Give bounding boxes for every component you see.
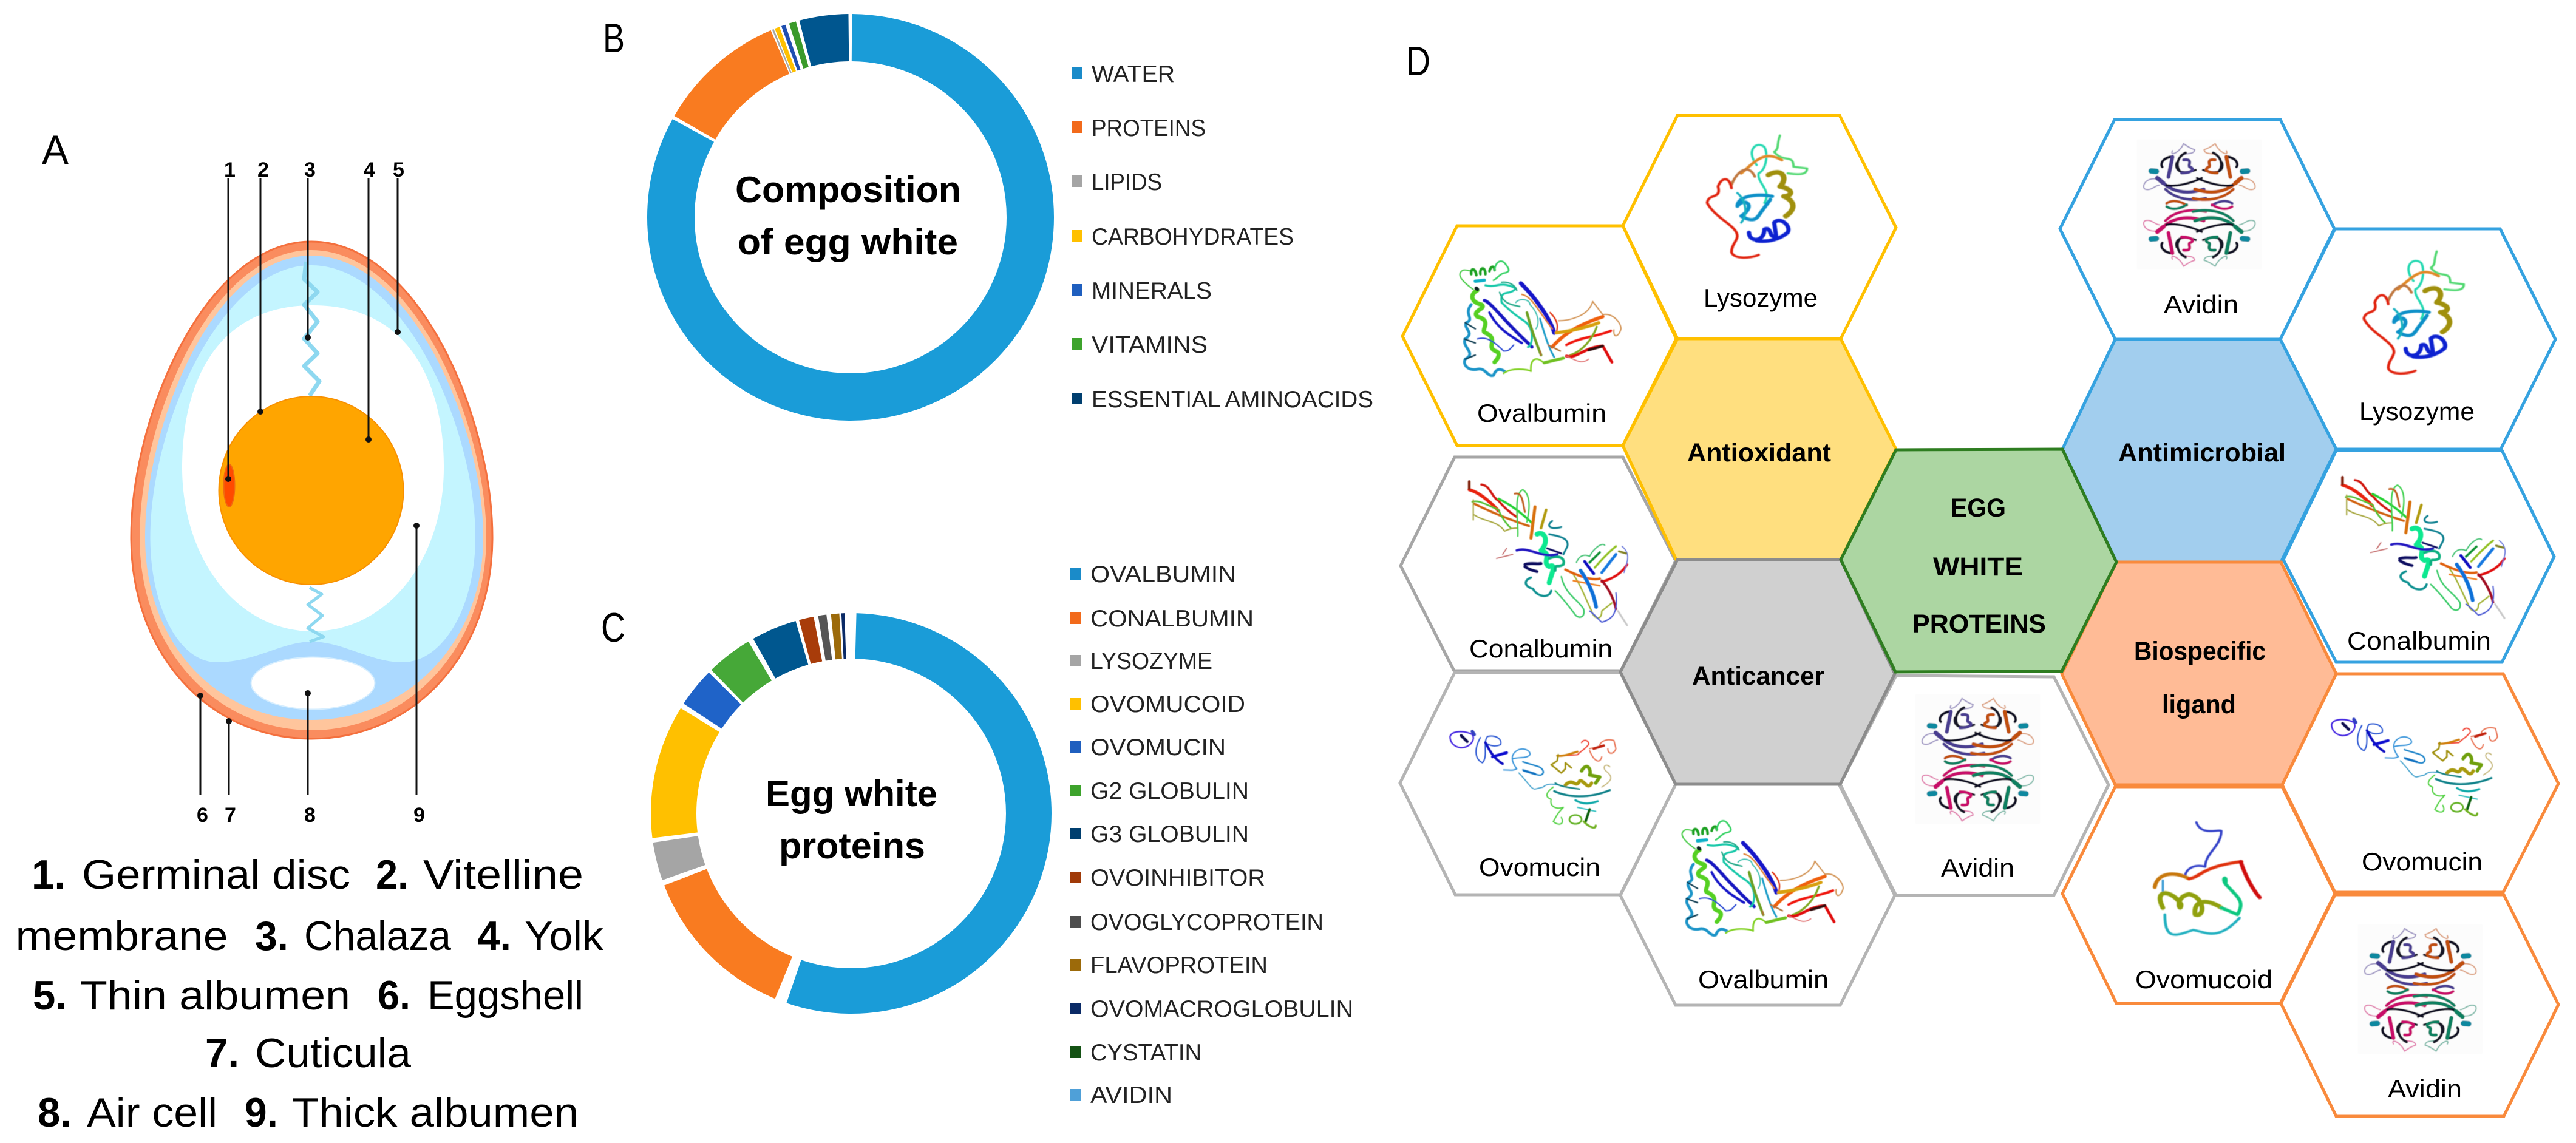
legend: composition: VITAMINS — [1092, 332, 1208, 358]
callout numbers: 9 — [413, 804, 425, 827]
egg parts key text: Chalaza — [304, 913, 451, 959]
egg parts key text: 5. — [33, 972, 67, 1019]
callout numbers: 2 — [257, 158, 269, 181]
yolk — [219, 396, 403, 585]
panel: C egg white proteins — [601, 561, 1353, 1108]
legend: proteins: OVOMUCIN — [1090, 734, 1226, 761]
egg parts key text: membrane — [16, 913, 228, 959]
legend: proteins: AVIDIN — [1090, 1082, 1172, 1108]
hexagon: Biospecific ligand category — [2062, 562, 2336, 785]
egg parts key text: 1. — [32, 852, 66, 898]
hexagon: EGG WHITE PROTEINS centre: PROTEINS — [1912, 609, 2046, 639]
egg parts key text: Eggshell — [427, 972, 583, 1019]
lower chalaza — [308, 588, 324, 642]
thin albumen — [151, 265, 475, 662]
egg cross-section illustration — [131, 242, 492, 739]
hexagon: Avidin (anticancer): Avidin — [1941, 853, 2014, 882]
panel letter D: D — [1406, 38, 1430, 84]
donut centre title: proteins — [779, 826, 925, 866]
donut centre title — [766, 773, 937, 866]
egg parts key text: Germinal disc — [82, 852, 350, 898]
air cell — [251, 657, 375, 709]
hexagon: Biospecific ligand category: ligand — [2162, 690, 2236, 719]
callout numbers — [197, 158, 425, 827]
eggshell and cuticula — [131, 242, 492, 739]
hexagon: Ovomucoid (biospecific ligand): Ovomucoid — [2135, 965, 2272, 994]
callout numbers: 3 — [304, 158, 316, 181]
hexagon: Ovomucin (biospecific ligand) — [2282, 674, 2558, 892]
panel: D egg white protein hexagon map — [1400, 38, 2558, 1116]
callout numbers: 4 — [364, 158, 375, 181]
callout numbers: 1 — [224, 158, 236, 181]
hexagon: Ovalbumin (antioxidant) — [1402, 226, 1676, 446]
hexagon: EGG WHITE PROTEINS centre: WHITE — [1933, 552, 2023, 582]
egg parts key text: Thin albumen — [80, 972, 350, 1019]
donut centre title: of egg white — [738, 222, 958, 262]
legend: proteins: OVOMACROGLOBULIN — [1090, 996, 1353, 1022]
egg parts key text: 8. — [38, 1090, 72, 1136]
egg parts key text: 9. — [245, 1090, 278, 1136]
hexagon: Ovalbumin (antioxidant): Ovalbumin — [1477, 399, 1606, 427]
legend: composition: ESSENTIAL AMINOACIDS — [1092, 387, 1373, 413]
legend: proteins: CYSTATIN — [1090, 1040, 1201, 1066]
hexagon: Anticancer category — [1620, 560, 1895, 784]
egg parts key text: 6. — [378, 972, 410, 1019]
callout numbers: 7 — [225, 804, 236, 827]
hexagon: Lysozyme (antimicrobial) — [2280, 229, 2555, 449]
legend: composition: PROTEINS — [1092, 115, 1206, 141]
hexagon: Avidin (antimicrobial) — [2060, 120, 2334, 339]
legend: composition: WATER — [1092, 61, 1175, 87]
hexagon: Antioxidant category — [1623, 339, 1896, 560]
hexagon: Lysozyme (antimicrobial): Lysozyme — [2359, 397, 2475, 426]
hexagon: Conalbumin (antimicrobial): Conalbumin — [2347, 626, 2491, 655]
shell membrane — [140, 250, 486, 730]
outer blue membrane — [145, 256, 483, 720]
callout numbers: 5 — [393, 158, 404, 181]
egg parts key text: Air cell — [87, 1090, 217, 1136]
legend: proteins — [1070, 561, 1353, 1108]
legend: proteins: OVOINHIBITOR — [1090, 865, 1265, 891]
legend: composition — [1072, 61, 1373, 413]
legend: proteins: OVOMUCOID — [1090, 691, 1245, 717]
panel letter C: C — [601, 605, 625, 651]
legend: proteins: G3 GLOBULIN — [1090, 821, 1249, 847]
panel letter A: A — [42, 127, 69, 173]
hexagon: Conalbumin (anticancer): Conalbumin — [1469, 634, 1613, 663]
callout lines and dots — [197, 178, 420, 795]
callout numbers: 8 — [304, 804, 316, 827]
donut centre title — [735, 169, 961, 262]
legend: proteins: OVOGLYCOPROTEIN — [1090, 909, 1324, 935]
hexagon: EGG WHITE PROTEINS centre — [1841, 449, 2116, 672]
legend: proteins: G2 GLOBULIN — [1090, 778, 1249, 804]
germinal disc — [223, 464, 234, 507]
legend: composition: LIPIDS — [1092, 169, 1162, 195]
hexagon: Conalbumin (anticancer) — [1401, 457, 1676, 671]
hexagon: Conalbumin (antimicrobial) — [2283, 450, 2554, 662]
egg parts key text: 2. — [376, 852, 409, 898]
panel: B composition of egg white — [603, 15, 1373, 413]
egg parts key text: 4. — [477, 913, 511, 959]
hexagon: EGG WHITE PROTEINS centre: EGG — [1951, 493, 2006, 523]
hexagon: Ovomucin (biospecific ligand): Ovomucin — [2362, 847, 2483, 876]
hexagon: Ovalbumin (anticancer): Ovalbumin — [1698, 965, 1829, 994]
hexagon: Ovomucin (anticancer): Ovomucin — [1479, 853, 1600, 881]
hexagon: Avidin (biospecific ligand): Avidin — [2388, 1074, 2462, 1103]
panel letter B: B — [603, 15, 625, 61]
egg parts key text: 7. — [205, 1030, 239, 1076]
donut chart: composition — [671, 38, 1030, 397]
egg parts key text: Thick albumen — [292, 1090, 579, 1136]
donut centre title: Composition — [735, 169, 961, 210]
legend: proteins: CONALBUMIN — [1090, 606, 1254, 632]
legend: proteins: LYSOZYME — [1090, 648, 1212, 674]
egg parts key text: 3. — [255, 913, 288, 959]
hexagon: Ovalbumin (anticancer) — [1620, 784, 1895, 1005]
hexagon: Ovomucin (anticancer) — [1400, 673, 1676, 895]
hexagon: Avidin (antimicrobial): Avidin — [2164, 290, 2238, 319]
hexagon: Ovomucoid (biospecific ligand) — [2062, 787, 2335, 1003]
egg parts key text: Cuticula — [255, 1030, 411, 1076]
thick albumen — [182, 305, 444, 631]
hexagon: Biospecific ligand category: Biospecific — [2134, 637, 2266, 666]
legend: proteins: FLAVOPROTEIN — [1090, 952, 1268, 979]
hexagon: Antimicrobial category — [2062, 339, 2336, 562]
hexagon: Lysozyme (antioxidant): Lysozyme — [1704, 283, 1818, 312]
hexagon: Avidin (biospecific ligand) — [2281, 895, 2558, 1116]
egg parts key text: Vitelline — [423, 852, 583, 898]
donut centre title: Egg white — [766, 773, 937, 814]
donut chart: proteins — [674, 636, 1028, 991]
legend: proteins: OVALBUMIN — [1090, 561, 1236, 588]
legend: composition: MINERALS — [1092, 278, 1212, 304]
hexagon: Avidin (anticancer) — [1840, 676, 2109, 895]
legend: composition: CARBOHYDRATES — [1092, 224, 1294, 250]
hexagon: Lysozyme (antioxidant) — [1623, 115, 1896, 339]
egg parts key text — [16, 852, 604, 1136]
callout numbers: 6 — [197, 804, 208, 827]
hexagon: Anticancer category: Anticancer — [1692, 662, 1824, 691]
hexagon: Antioxidant category: Antioxidant — [1687, 438, 1831, 467]
hexagon: Antimicrobial category: Antimicrobial — [2118, 438, 2286, 467]
panel: A egg diagram — [16, 127, 604, 1136]
upper chalaza — [304, 262, 319, 396]
egg parts key text: Yolk — [525, 913, 604, 959]
